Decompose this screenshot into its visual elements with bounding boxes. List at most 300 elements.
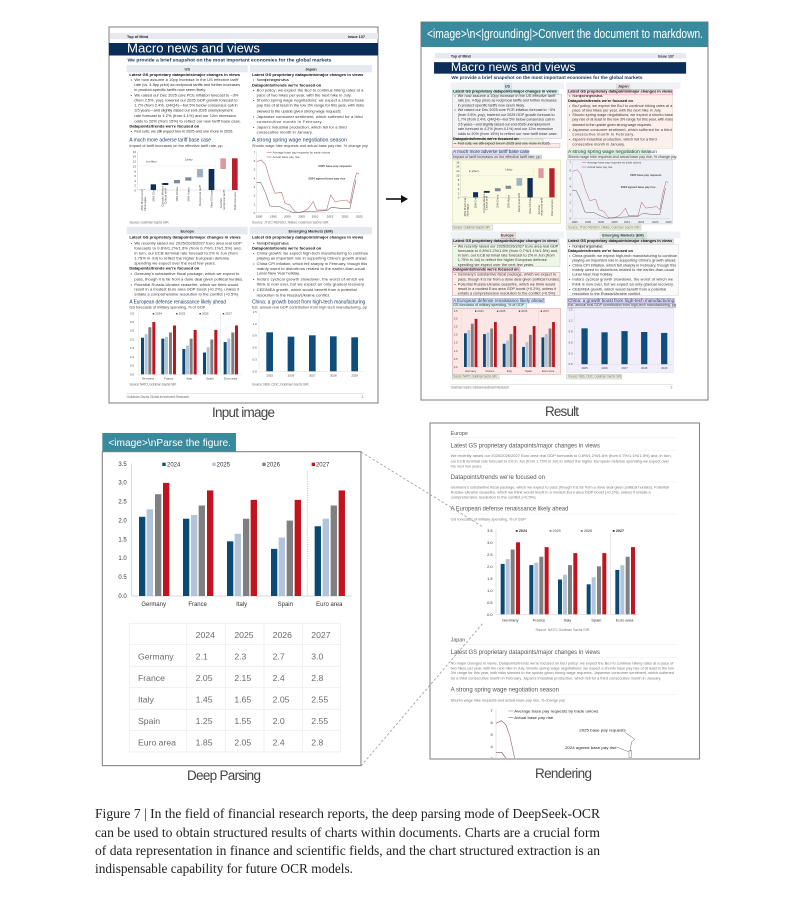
- panel: Emerging Markets text: •: [569, 245, 571, 249]
- panel: US text: •: [454, 94, 456, 98]
- panel: Emerging Markets text: Lunar New Year holiday.: [572, 272, 613, 276]
- panel: Japan text: •: [253, 98, 255, 103]
- prompt banner: parse the figure: <image>\nParse the figure.: [108, 438, 231, 449]
- chart: shunto wages line chart: 2: [254, 194, 256, 198]
- chart: tariff base case: Canada Mexico &: [482, 191, 486, 213]
- chart: shunto wages line chart: 2025: [665, 220, 672, 224]
- chart: shunto wages line chart: A strong spring wage negotiation season: [252, 138, 347, 144]
- chart: shunto wages line chart: 2005: [298, 215, 305, 219]
- bar chart: military spending: [118, 462, 352, 608]
- caption: input image: Input image: [212, 405, 275, 420]
- bar chart: rendered: [487, 528, 638, 617]
- bottom half of page: Europe and EM: [127, 227, 372, 399]
- panel: Emerging Markets text: •: [569, 287, 571, 291]
- panel: US text: rate (vs. 4-5pp prior) as reciprocal tariffs and further increases: [458, 99, 557, 103]
- panel: Japan text: Japan: [618, 84, 629, 88]
- line chart: rendered: 7: [490, 708, 493, 713]
- panel: Japan text: No major changes in views.: [572, 94, 603, 98]
- chart: tariff base case: Another: [537, 205, 541, 214]
- chart: shunto wages line chart: 2020: [342, 215, 349, 219]
- document page: input: [109, 33, 378, 399]
- data table: 2.8: [311, 673, 324, 683]
- chart: shunto wages line chart: 2010: [624, 220, 631, 224]
- bar chart: rendered: 1.5: [487, 576, 493, 581]
- panel: US text: Fed cuts; we still expect two in 2025 and one more in 2026.: [134, 129, 233, 134]
- panel: US text: We raised our Dec 2025 core PCE inflation forecast to ~3%: [458, 108, 556, 112]
- chart: shunto wages line chart: 2025 base pay requests: [318, 164, 352, 168]
- rendered markdown: Japan: Shunto wage hike requests and actual base pay rise, % change yoy: [451, 699, 565, 703]
- bar chart: military spending: Euro area: [316, 602, 343, 608]
- bar chart: military spending: 2.0: [118, 518, 127, 524]
- chart: tariff base case: 2: [134, 184, 136, 188]
- panel: Europe text: Datapoints/trends we're focused on: [129, 266, 200, 271]
- page header: [109, 33, 378, 62]
- panel: result: [421, 22, 708, 400]
- chart: tariff base case: 25% Autos: [186, 187, 190, 202]
- panel: Japan text: No major changes in views.: [257, 77, 289, 82]
- rendered markdown: Japan: No major changes in views. Datapoints/trends we're focused on BoJ policy: we expect the BoJ to continue hiking rates at a pace of: [451, 661, 673, 665]
- chart: shunto wages line chart: 1995: [585, 220, 592, 224]
- bar chart: rendered: 0.0: [487, 612, 493, 617]
- panel: Europe text: in turn, our ECB terminal rate forecast to 2% in Jun (from: [458, 254, 555, 258]
- panel: Europe text: Europe: [180, 228, 195, 233]
- data table: 2.1: [196, 651, 208, 661]
- chart: tariff base case: Likely: [185, 158, 193, 162]
- chart: tariff base case: 10: [133, 164, 136, 168]
- chart: tariff base case: 12: [133, 160, 136, 164]
- panel: Emerging Markets text: Latest GS proprietary datapoints/major changes in views: [252, 234, 364, 239]
- chart: China growth boost: China: a growth boost from high-tech manufacturing: [568, 298, 675, 304]
- panel: Emerging Markets text: [566, 231, 680, 296]
- panel: Europe text: in turn, our ECB terminal rate forecast to 2% in Jun (from: [134, 250, 238, 255]
- chart: European defense spending: Euro area: [542, 369, 555, 373]
- page header: We provide a brief snapshot on the most important economies for the global markets: [451, 75, 643, 80]
- chart: shunto wages line chart: 2015: [327, 215, 334, 219]
- chart: China growth boost: 2025: [581, 366, 588, 370]
- panel: Japan text: pay rise of at least in the low 3% range for this year, with risks: [572, 118, 673, 122]
- prompt banner: grounding: [421, 22, 708, 47]
- panel: US text: [451, 82, 564, 146]
- chart: tariff base case: Nicaragua: [466, 203, 470, 216]
- page header: Top of Mind: [127, 35, 149, 39]
- panel: Japan text: •: [569, 113, 571, 117]
- panel: Emerging Markets text: playing an important role in supporting China's growth ahead.: [572, 259, 676, 262]
- bar chart: military spending: 3.0: [118, 481, 127, 487]
- bar chart: military spending: Germany: [141, 602, 166, 608]
- caption: result: Result: [545, 404, 579, 419]
- chart: shunto wages line chart: 7: [570, 161, 572, 165]
- panel: Europe text: •: [131, 282, 133, 287]
- chart: tariff base case: Source: Goldman Sachs GIR.: [129, 221, 169, 225]
- panel: Japan text: Japanese consumer sentiment, which softened for a third: [572, 128, 672, 132]
- panel: Emerging Markets text: CEE/MEA growth, which would benefit from a potential: [572, 287, 666, 291]
- chart: European defense spending: 0.5: [130, 364, 134, 368]
- panel: US text: [127, 65, 248, 134]
- chart: China growth boost: Est. annual real GDP contribution from high-tech manufacturing, pp: [252, 304, 368, 309]
- panel: Europe text: •: [454, 244, 456, 248]
- chart: shunto wages line chart: 1995: [270, 215, 277, 219]
- page header: Macro news and views: [127, 40, 260, 56]
- page header: Top of Mind: [451, 55, 471, 59]
- legend: 2025: [217, 462, 231, 468]
- chart: shunto wages line chart: Actual base pay rise: [273, 155, 300, 159]
- chart: China growth boost: Est. annual real GDP contribution from high-tech manufacturing, pp: [568, 303, 676, 307]
- chart: tariff base case: New GS base case: [528, 190, 532, 214]
- panel: Japan text: •: [253, 88, 255, 93]
- panel: Japan text: Japanese consumer sentiment, which softened for a third: [257, 114, 363, 119]
- data table: 2.8: [311, 738, 324, 748]
- panel: rendering: [430, 423, 700, 761]
- chart: shunto wages line chart: Average base pay requests by trade unions: [273, 150, 331, 154]
- data table: Euro area: [138, 738, 176, 748]
- connector: dashed lines between deep parsing and rendering: [361, 452, 483, 766]
- chart: shunto wages line chart: [252, 138, 368, 225]
- bar chart: military spending: 1.0: [118, 556, 127, 562]
- rendered markdown: Japan: two hikes per year, with the next hike in July. Shunto spring wage negotiations: we expect a shunto base pay rise of at least in the low: [451, 666, 674, 670]
- chart: tariff base case: In effect: [146, 160, 157, 164]
- panel: Europe text: •: [454, 273, 456, 277]
- page header: Issue 137: [348, 35, 365, 39]
- panel: Emerging Markets text: Datapoints/trends we're focused on: [252, 245, 322, 250]
- chart: shunto wages line chart: 1990: [571, 220, 578, 224]
- chart: European defense spending: Source: NATO, Goldman Sachs GIR.: [453, 374, 498, 378]
- rendered markdown: Japan: A strong spring wage negotiation season: [451, 687, 559, 693]
- page footer: Goldman Sachs Global Investment Research: [451, 386, 509, 390]
- rendered markdown: Europe: We recently raised our 2025/2026/2027 Euro area real GDP forecasts to 0.8%/1.2%/1.6% (from 0.7%/1.1%/1.5%) and, in turn,: [451, 454, 672, 458]
- panel: US text: •: [131, 129, 133, 134]
- panel: Europe text: Potential Russia-Ukraine ceasefire, which we think would: [134, 282, 238, 287]
- data table: 2.4: [273, 738, 285, 748]
- layout detection boxes upper: [452, 83, 675, 224]
- figure caption: Figure 7 | In the field of financial research reports, the deep parsing mode of DeepSeek-OCR: [95, 807, 601, 822]
- layout detection boxes lower: [452, 225, 678, 379]
- chart: tariff base case: 25% China: [151, 187, 155, 202]
- bar chart: rendered: ■ 2025: [549, 529, 561, 533]
- rendered markdown: Japan: for a third consecutive month in February. Japan's industrial production, which fell for a third consecutive month in January.: [451, 676, 661, 680]
- bottom half of page: Europe and EM: [451, 231, 680, 390]
- chart: European defense spending: A European defense renaissance likely ahead: [453, 298, 544, 304]
- chart: European defense spending: A European defense renaissance likely ahead: [129, 300, 226, 306]
- chart: shunto wages line chart: 6: [570, 169, 572, 173]
- panel: US text: odds to 20% (from 15%) to reflect our new tariff base case.: [134, 118, 241, 123]
- chart: European defense spending: Spain: [206, 377, 214, 381]
- chart: European defense spending: GS forecasts of military spending, % of GDP: [453, 303, 525, 307]
- panel: Japan text: skewed to the upside given strong wage requests.: [572, 123, 652, 127]
- line chart: rendered: [490, 708, 635, 761]
- panel: Japan text: [250, 65, 372, 135]
- panel: US text: •: [131, 77, 133, 82]
- panel: Japan text: pace of two hikes per year, with the next hike in July.: [257, 93, 352, 98]
- panel: Emerging Markets text: •: [253, 287, 255, 292]
- rendered markdown: Japan: Latest GS proprietary datapoints/major changes in views: [451, 650, 600, 656]
- chart: tariff base case: Canada Mexico &: [160, 183, 164, 207]
- line chart: rendered: 2024 agreed base pay rise: [565, 745, 617, 750]
- data table: 3.0: [311, 651, 324, 661]
- chart: European defense spending: Germany: [142, 377, 155, 381]
- chart: European defense spending: [129, 300, 242, 387]
- panel: Europe text: •: [131, 240, 133, 245]
- data table: 2.55: [311, 716, 328, 726]
- chart: China growth boost: 1.5: [253, 310, 257, 314]
- panel: Europe text: 1.75% in Jul) to reflect the higher European defense: [134, 255, 230, 260]
- chart: European defense spending: France: [164, 377, 174, 381]
- chart: China growth boost: 0.6: [569, 340, 573, 344]
- chart: tariff base case: [453, 149, 557, 229]
- chart: tariff base case: 6: [134, 174, 136, 178]
- panel: Emerging Markets text: think is now over, but we expect an only-gradual recovery.: [572, 282, 674, 286]
- chart: China growth boost: 0.6: [253, 346, 257, 350]
- chart: shunto wages line chart: 1990: [256, 215, 263, 219]
- line chart: rendered: Average base pay requests by trade unions: [514, 708, 598, 713]
- chart: tariff base case: A much more adverse tariff base case: [129, 138, 211, 144]
- chart: tariff base case: 25% Autos: [506, 194, 510, 208]
- panel: US text: Latest GS proprietary datapoints/major changes in views: [453, 90, 557, 94]
- chart: tariff base case: 8: [458, 178, 460, 182]
- bar chart: rendered: 0.5: [487, 600, 493, 605]
- panel: Japan text: consecutive month in February.: [257, 119, 323, 124]
- chart: China growth boost: [568, 298, 676, 378]
- panel: US text: •: [454, 108, 456, 112]
- chart: shunto wages line chart: 2025 base pay requests: [630, 173, 662, 177]
- rendered markdown: Japan: France: [533, 618, 546, 623]
- panel: Japan text: •: [253, 124, 255, 129]
- chart: shunto wages line chart: Average base pay requests by trade unions: [587, 161, 642, 165]
- chart: tariff base case: 25% China: [473, 194, 478, 208]
- bar chart: rendered: ■ 2027: [613, 529, 624, 533]
- chart: European defense spending: ■ 2025: [176, 312, 186, 316]
- chart: tariff base case: [129, 138, 240, 225]
- rendered markdown: Japan: Source: NATO, Goldman Sachs GIR: [535, 628, 590, 632]
- chart: tariff base case: 10% China: [496, 194, 500, 208]
- chart: shunto wages line chart: 2025: [356, 215, 363, 219]
- panel: Japan text: consecutive month in January.: [257, 130, 313, 135]
- data table: 2.05: [273, 694, 290, 704]
- rendered markdown: Japan: Italy: [564, 618, 571, 623]
- panel: Japan text: pay rise of at least in the low 3% range for this year, with risks: [257, 103, 364, 108]
- panel: Emerging Markets text: Datapoints/trends we're focused on: [568, 249, 633, 253]
- rendered markdown: Japan: Japan: [451, 638, 465, 644]
- chart: European defense spending: ■ 2027: [223, 312, 232, 316]
- chart: European defense spending: 0.0: [454, 365, 458, 369]
- chart: tariff base case: Impact of tariff increases on the effective tariff rate, pp: [129, 143, 223, 148]
- rendered markdown: Europe: GS forecasts of military spending, % of GDP: [451, 518, 527, 522]
- panel: US text: (from 2.5%, yoy), lowered our 2025 GDP growth forecast to: [458, 113, 555, 117]
- top half of page: US and Japan: [451, 82, 680, 229]
- chart: China growth boost: 2028: [641, 366, 648, 370]
- panel: Europe text: Germany's substantive fiscal package, which we expect to: [134, 271, 240, 276]
- chart: shunto wages line chart: 2024 agreed base pay rise: [621, 185, 656, 189]
- chart: tariff base case: 0: [134, 188, 136, 192]
- prompt banner: parse the figure: [102, 433, 236, 452]
- chart: tariff base case: Source: Goldman Sachs GIR.: [453, 225, 491, 229]
- panel: US text: rate (vs. 4-5pp prior) as reciprocal tariffs and further increases: [134, 82, 240, 87]
- data table: 2.15: [234, 673, 251, 683]
- panel: Japan text: •: [569, 104, 571, 108]
- chart: China growth boost: Source: NBS, CEIC, Goldman Sachs GIR.: [252, 383, 309, 387]
- chart: shunto wages line chart: Shunto wage hike requests and actual base pay rise, % change yoy: [252, 143, 368, 148]
- panel: Japan text: Shunto spring wage negotiations; we expect a shunto base: [572, 113, 673, 117]
- panel: US text: rate forecast to 4.2% (from 4.1%) and our 12m recession: [134, 113, 236, 118]
- bar chart: military spending: Spain: [278, 602, 293, 608]
- page footer: [127, 393, 364, 399]
- panel: Japan text: BoJ policy; we expect the BoJ to continue hiking rates at a: [257, 88, 364, 93]
- data table: 2.7: [273, 651, 285, 661]
- chart: China growth boost: 0.9: [253, 334, 257, 338]
- bar chart: rendered: 3.5: [487, 528, 493, 533]
- rendered markdown: Japan: Spain: [591, 618, 601, 623]
- chart: shunto wages line chart: 2: [570, 201, 572, 205]
- chart: European defense spending: 3.5: [454, 309, 458, 313]
- panel: Europe text: We recently raised our 2025/2026/2027 Euro area real GDP: [134, 240, 242, 245]
- panel: US text: Datapoints/trends we're focused on: [453, 137, 519, 141]
- chart: shunto wages line chart: [568, 149, 677, 229]
- chart: shunto wages line chart: 7: [254, 150, 256, 154]
- panel: US text: in product-specific tariffs now seem likely.: [458, 103, 525, 107]
- page footer: [451, 384, 673, 390]
- data table: 1.45: [196, 694, 213, 704]
- chart: tariff base case: Likely: [505, 167, 513, 171]
- chart: shunto wages line chart: 2000: [284, 215, 291, 219]
- panel: Japan text: pace of two hikes per year, with the next hike in July.: [572, 109, 661, 113]
- legend: 2026: [267, 462, 281, 468]
- rendered markdown: Europe: Europe: [451, 431, 468, 437]
- data table: 1.85: [196, 738, 213, 748]
- page header: Macro news and views: [451, 60, 576, 74]
- chart: shunto wages line chart: 2020: [652, 220, 659, 224]
- chart: China growth boost: 2027: [621, 366, 628, 370]
- chart: tariff base case: 4: [458, 187, 460, 191]
- chart: tariff base case: Impact of tariff increases on the effective tariff rate, pp: [453, 155, 541, 159]
- rendered markdown: Japan: [451, 618, 677, 761]
- panel: Europe text: result in a modest Euro area GDP boost (+0.2%), unless it: [458, 287, 556, 291]
- chart: tariff base case: A much more adverse tariff base case: [453, 149, 530, 155]
- chart: European defense spending: 3.0: [454, 317, 458, 321]
- chart: shunto wages line chart: 1: [254, 202, 256, 206]
- panel: Japan text: Japan's industrial production, which fell for a third: [257, 124, 347, 129]
- bar chart: military spending: 3.5: [118, 462, 127, 468]
- chart: shunto wages line chart: 4: [570, 185, 572, 189]
- page footer: Goldman Sachs Global Investment Research: [127, 395, 189, 399]
- chart: China growth boost: 0.3: [569, 351, 573, 355]
- chart: European defense spending: 0.5: [454, 357, 458, 361]
- chart: China growth boost: 1.5: [569, 308, 573, 312]
- chart: China growth boost: 2026: [288, 374, 295, 378]
- panel: Emerging Markets text: [250, 227, 372, 297]
- chart: China growth boost: 2027: [309, 374, 316, 378]
- rendered markdown: Europe: comprehensive resolution to the conflict (+0.5%).: [451, 496, 537, 500]
- panel: Europe text: forecasts to 0.8%/1.2%/1.6% (from 0.7%/1.1%/1.5%) and,: [458, 249, 558, 253]
- panel: Japan text: skewed to the upside given strong wage requests.: [257, 108, 342, 113]
- page header: Issue 137: [658, 55, 674, 59]
- panel: input image: [109, 27, 378, 403]
- chart: China growth boost: 0.3: [253, 358, 257, 362]
- bar chart: military spending: France: [188, 602, 208, 608]
- panel: Japan text: [566, 82, 680, 147]
- chart: shunto wages line chart: Shunto wage hike requests and actual base pay rise, % change yoy: [568, 155, 677, 159]
- chart: shunto wages line chart: 3: [570, 193, 572, 197]
- data table: 2.05: [196, 673, 213, 683]
- chart: tariff base case: 25% Brazil and: [140, 190, 144, 211]
- panel: Emerging Markets text: CEE/MEA growth, which would benefit from a potential: [257, 287, 357, 292]
- chart: European defense spending: 3.0: [130, 320, 134, 324]
- chart: China growth boost: 0.0: [253, 369, 257, 373]
- chart: shunto wages line chart: 2015: [638, 220, 645, 224]
- chart: European defense spending: Source: NATO, Goldman Sachs GIR.: [129, 383, 177, 387]
- panel: Europe text: pass, though it is far from a done deal given political hurdles.: [458, 278, 560, 281]
- line chart: rendered: 2025 base pay requests: [579, 727, 626, 732]
- panel: US text: rate forecast to 4.2% (from 4.1%) and our 12m recession: [458, 127, 553, 131]
- rendered markdown: Europe: Datapoints/trends we're focused on: [451, 475, 545, 481]
- chart: European defense spending: 3.5: [130, 311, 134, 315]
- panel: Emerging Markets text: China growth; we expect high-tech manufacturing to continue: [572, 254, 677, 258]
- caption: rendering: Rendering: [535, 766, 592, 781]
- panel: Emerging Markets text: India's cyclical growth slowdown, the worst of which we: [572, 278, 673, 281]
- data table: 2024: [196, 630, 215, 640]
- chart: tariff base case: 12: [456, 169, 460, 173]
- panel: Europe text: •: [454, 283, 456, 287]
- rendered markdown: Europe: [451, 431, 677, 617]
- panel: Emerging Markets text: think is now over, but we expect an only-gradual recovery.: [257, 282, 365, 287]
- panel: Emerging Markets text: No major changes in views.: [257, 241, 289, 246]
- panel: Emerging Markets text: •: [253, 241, 255, 246]
- rendered markdown: Japan: Euro area: [616, 618, 634, 623]
- panel: Europe text: Europe: [501, 233, 514, 237]
- line chart: rendered: 5: [490, 732, 493, 737]
- chart: China growth boost: 0.9: [569, 329, 573, 333]
- chart: European defense spending: 2.0: [454, 333, 458, 337]
- panel: Emerging Markets text: China CPI inflation, which fell sharply in February, though this: [572, 263, 676, 267]
- panel: US text: We raised our Dec 2025 core PCE inflation forecast to ~3%: [134, 92, 239, 97]
- chart: tariff base case: 10: [456, 174, 460, 178]
- line chart: rendered: Actual base pay rise: [514, 715, 554, 720]
- chart: China growth boost: 2025: [266, 374, 273, 378]
- data table: 2.0: [273, 716, 285, 726]
- chart: European defense spending: 2.0: [130, 337, 134, 341]
- panel: Emerging Markets text: playing an important role in supporting China's growth ahead.: [257, 256, 368, 261]
- panel: Emerging Markets text: •: [569, 278, 571, 281]
- prompt banner: grounding: <image>\n<|grounding|>Convert the document to markdown.: [427, 26, 703, 41]
- chart: tariff base case: Critical tariff: [485, 196, 489, 210]
- chart: European defense spending: 1.0: [130, 355, 134, 359]
- panel: US text: •: [131, 92, 133, 97]
- panel: US text: in product-specific tariffs now seem likely.: [134, 87, 206, 92]
- page footer: 3: [670, 386, 673, 390]
- panel: Emerging Markets text: •: [569, 263, 571, 267]
- chart: European defense spending: Italy: [187, 377, 193, 381]
- panel: Emerging Markets text: resolution to the Russia/Ukraine conflict.: [572, 292, 641, 296]
- chart: tariff base case: 14: [456, 165, 460, 169]
- panel: Europe text: Datapoints/trends we're focused on: [453, 268, 519, 272]
- panel: Europe text: spending we expect over the next few years.: [134, 260, 216, 265]
- panel: Japan text: Datapoints/trends we're focused on: [252, 82, 322, 87]
- panel: Emerging Markets text: India's cyclical growth slowdown, the worst of which we: [257, 276, 365, 281]
- chart: European defense spending: 2.5: [130, 329, 134, 333]
- figure caption: indispensable capability for future OCR models.: [95, 862, 353, 877]
- chart: tariff base case: Nicaragua: [143, 197, 147, 211]
- chart: tariff base case: 25% Brazil and: [463, 198, 467, 216]
- chart: tariff base case: Risk scenario: [550, 199, 554, 216]
- chart: tariff base case: 16: [133, 150, 136, 154]
- panel: Emerging Markets text: China growth; we expect high-tech manufacturing to continue: [257, 251, 369, 256]
- chart: European defense spending: France: [486, 369, 495, 373]
- chart: China growth boost: 2028: [330, 374, 337, 378]
- rendered markdown: Japan: Germany: [502, 618, 519, 623]
- panel: Japan text: BoJ policy; we expect the BoJ to continue hiking rates at a: [572, 104, 673, 108]
- rendered markdown: Europe: Latest GS proprietary datapoints/major changes in views: [451, 443, 600, 449]
- chart: European defense spending: Spain: [525, 369, 533, 373]
- panel: Emerging Markets text: •: [253, 276, 255, 281]
- data table: 2.3: [234, 651, 247, 661]
